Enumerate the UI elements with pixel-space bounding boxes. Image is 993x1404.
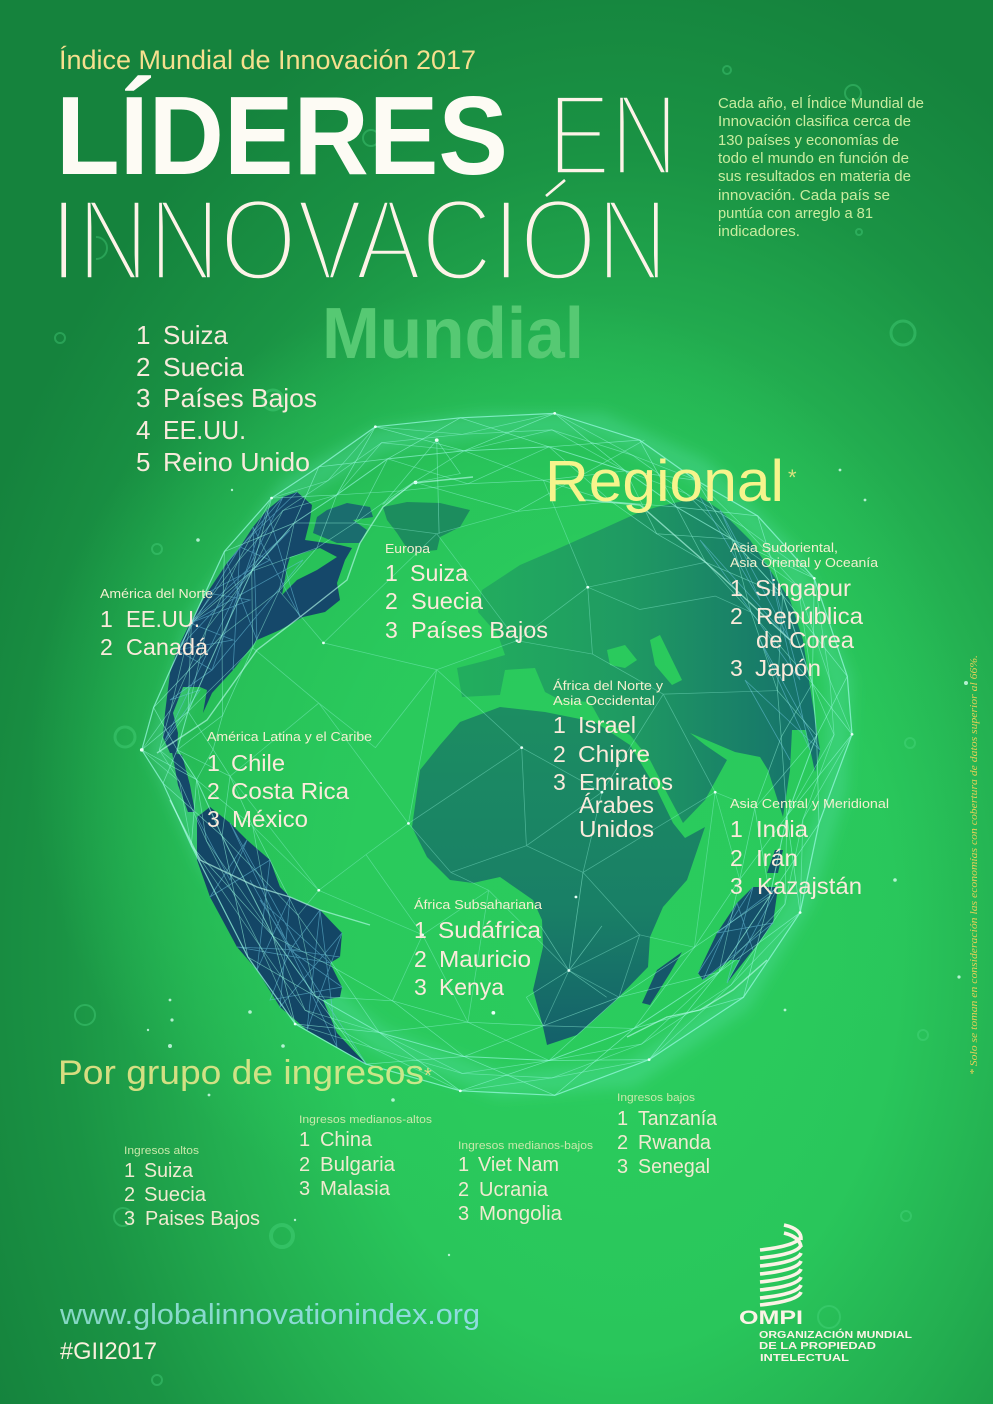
intro paragraph: innovación. Cada país se	[718, 188, 890, 204]
list: Ingresos altos: 3	[124, 1208, 135, 1230]
list: Asia Central y Meridional: Asia Central y Meridional	[730, 797, 889, 811]
list: Asia Central y Meridional: India	[756, 816, 808, 842]
mesh over dark continents	[165, 492, 820, 1065]
list: Ingresos medianos-altos: 3	[299, 1178, 310, 1200]
list: África del Norte y Asia Occidental: África del Norte y	[553, 678, 664, 693]
list: Ingresos bajos: 2	[617, 1132, 628, 1154]
list: Europa: Países Bajos	[411, 617, 548, 643]
heading: LÍDERES: LÍDERES	[56, 74, 508, 198]
network mesh	[140, 412, 853, 1095]
list: África del Norte y Asia Occidental: Emiratos	[579, 769, 673, 795]
list: Mundial ranking: 1	[136, 320, 150, 350]
list: Ingresos medianos-bajos: Viet Nam	[478, 1154, 559, 1176]
rim glow	[160, 425, 840, 1085]
list: Europa: Europa	[385, 542, 430, 556]
list: Europa	[385, 542, 548, 643]
list: Europa: 2	[385, 588, 398, 614]
list: Ingresos bajos: Rwanda	[638, 1132, 712, 1154]
list: Ingresos bajos: 3	[617, 1156, 628, 1178]
intro paragraph: puntúa con arreglo a 81	[718, 206, 873, 222]
continent: Australia	[698, 887, 778, 983]
list: Mundial ranking: Reino Unido	[163, 447, 310, 477]
list: África del Norte y Asia Occidental: Árabes	[579, 792, 654, 818]
list: América del Norte: EE.UU.	[126, 606, 200, 632]
list: Ingresos medianos-altos: 1	[299, 1129, 310, 1151]
list: América del Norte: 2	[100, 634, 113, 660]
list: Ingresos medianos-altos: China	[320, 1129, 373, 1151]
list: Asia Sudoriental, Asia Oriental y Oceanía: Singapur	[755, 575, 851, 601]
list: Mundial ranking: 4	[136, 415, 150, 445]
list: África Subsahariana: 2	[414, 946, 427, 972]
list: América Latina y el Caribe: 3	[207, 806, 220, 832]
subtitle: Índice Mundial de Innovación 2017	[59, 45, 476, 75]
list: Asia Central y Meridional: 2	[730, 845, 743, 871]
list: Asia Central y Meridional: Kazajstán	[757, 873, 862, 899]
list: Europa: 3	[385, 617, 398, 643]
list: Asia Sudoriental, Asia Oriental y Oceanía: 3	[730, 655, 743, 681]
list: Ingresos bajos: Tanzanía	[638, 1108, 718, 1130]
list: Ingresos altos: 1	[124, 1160, 135, 1182]
list: África Subsahariana: 1	[414, 917, 427, 943]
list: Asia Central y Meridional: 1	[730, 816, 743, 842]
list: América Latina y el Caribe: América Latina y el Caribe	[207, 730, 372, 744]
list: Mundial ranking: 3	[136, 383, 150, 413]
list: América Latina y el Caribe: 2	[207, 778, 220, 804]
intro paragraph: Cada año, el Índice Mundial de	[718, 95, 924, 112]
list: América Latina y el Caribe: Chile	[231, 750, 285, 776]
list: Mundial ranking: 2	[136, 352, 150, 382]
accent stroke	[546, 180, 565, 196]
heading: EN: EN	[548, 70, 678, 200]
hashtag: #GII2017	[60, 1338, 157, 1365]
logo subtitle: ORGANIZACIÓN MUNDIAL	[759, 1328, 913, 1341]
continent: Africa	[412, 707, 705, 1045]
list: Asia Central y Meridional: 3	[730, 873, 743, 899]
list: Ingresos medianos-altos	[299, 1114, 433, 1200]
list: Ingresos medianos-bajos: Mongolia	[479, 1203, 563, 1225]
list: Ingresos bajos: Ingresos bajos	[617, 1092, 696, 1104]
list: Ingresos medianos-altos: Ingresos medianos-altos	[299, 1114, 433, 1126]
list: Ingresos altos: Ingresos altos	[124, 1145, 200, 1157]
list: África del Norte y Asia Occidental: 1	[553, 712, 566, 738]
continent: Greenland	[383, 502, 470, 553]
list: Asia Central y Meridional: Irán	[756, 845, 798, 871]
list: Mundial ranking: 5	[136, 447, 150, 477]
list: Asia Sudoriental, Asia Oriental y Oceanía: 1	[730, 575, 743, 601]
list: Asia Central y Meridional	[730, 797, 889, 899]
heading: Por grupo de ingresos: *	[424, 1065, 432, 1087]
list: América Latina y el Caribe: México	[232, 806, 308, 832]
list: Ingresos medianos-bajos: 2	[458, 1179, 469, 1201]
mesh nodes	[140, 412, 853, 1092]
list: Mundial ranking	[136, 320, 317, 477]
list: Ingresos medianos-altos: 2	[299, 1154, 310, 1176]
side footnote: * Solo se toman en consideración las economías con cobertura de datos superior al 66%.	[969, 655, 980, 1075]
list: Ingresos medianos-altos: Bulgaria	[320, 1154, 396, 1176]
heading: INNOVACIÓN: INNOVACIÓN	[50, 175, 668, 305]
list: Ingresos medianos-bajos: 1	[458, 1154, 469, 1176]
list: Ingresos altos	[124, 1145, 260, 1230]
list: Ingresos altos: 2	[124, 1184, 135, 1206]
list: África del Norte y Asia Occidental: Asia Occidental	[553, 694, 655, 708]
continent: Indonesia	[767, 850, 783, 873]
list: África Subsahariana: Kenya	[439, 974, 504, 1000]
list: Ingresos bajos: 1	[617, 1108, 628, 1130]
list: Europa: Suecia	[411, 588, 483, 614]
continent: South America	[197, 807, 367, 1065]
list: África Subsahariana: Mauricio	[439, 946, 531, 972]
list: Mundial ranking: Suecia	[163, 352, 245, 382]
list: América Latina y el Caribe: Costa Rica	[231, 778, 349, 804]
list: América del Norte	[100, 587, 213, 660]
list: Asia Sudoriental, Asia Oriental y Oceanía: 2	[730, 603, 743, 629]
list: América del Norte: Canadá	[126, 634, 208, 660]
continent: Central America	[172, 752, 195, 812]
list: Ingresos bajos: Senegal	[638, 1156, 710, 1178]
list: África del Norte y Asia Occidental: 2	[553, 741, 566, 767]
list: Asia Sudoriental, Asia Oriental y Oceanía: Asia Sudoriental,	[730, 541, 838, 555]
list: América del Norte: 1	[100, 606, 113, 632]
bright inner arcs	[157, 477, 790, 1037]
list: Europa: Suiza	[410, 560, 468, 586]
list: Asia Sudoriental, Asia Oriental y Oceanía	[730, 541, 878, 681]
globe glow	[30, 285, 970, 1225]
list: África Subsahariana: África Subsahariana	[414, 897, 542, 912]
continent: Canadian Arctic	[313, 503, 373, 543]
list: Ingresos medianos-bajos: Ucrania	[479, 1179, 549, 1201]
heading: Regional: Regional	[545, 449, 784, 514]
list: Ingresos medianos-bajos: Ingresos medianos-bajos	[458, 1140, 594, 1152]
stars	[147, 469, 968, 1256]
list: Ingresos medianos-bajos	[458, 1140, 594, 1225]
title block	[50, 45, 678, 305]
list: América Latina y el Caribe	[207, 730, 372, 832]
icon: WIPO stripes	[760, 1225, 801, 1305]
intro paragraph: indicadores.	[718, 224, 800, 240]
heading: Mundial: Mundial	[322, 294, 584, 374]
list: África del Norte y Asia Occidental	[553, 678, 673, 842]
list: África del Norte y Asia Occidental: Unidos	[579, 816, 654, 842]
website URL: www.globalinnovationindex.org	[59, 1299, 480, 1331]
logo: OMPI	[739, 1225, 913, 1364]
list: América Latina y el Caribe: 1	[207, 750, 220, 776]
list: Ingresos altos: Suecia	[144, 1184, 207, 1206]
intro paragraph: todo el mundo en función de	[718, 151, 909, 167]
intro paragraph: 130 países y economías de	[718, 133, 899, 149]
list: África del Norte y Asia Occidental: Chipre	[578, 741, 650, 767]
list: África Subsahariana	[414, 897, 542, 1000]
globe with continents and network mesh	[140, 412, 853, 1095]
list: Mundial ranking: Países Bajos	[163, 383, 317, 413]
continent: North America	[163, 492, 352, 753]
list: Ingresos altos: Paises Bajos	[145, 1208, 260, 1230]
list: Mundial ranking: EE.UU.	[163, 415, 246, 445]
list: Asia Sudoriental, Asia Oriental y Oceanía: Japón	[755, 655, 821, 681]
intro paragraph: Innovación clasifica cerca de	[718, 114, 911, 130]
continent: Eurasia	[457, 497, 820, 823]
list: Europa: 1	[385, 560, 398, 586]
list: África del Norte y Asia Occidental: Israel	[578, 712, 636, 738]
list: Asia Sudoriental, Asia Oriental y Oceanía: República	[756, 603, 863, 629]
continent: Madagascar	[642, 952, 682, 1005]
list: Ingresos medianos-bajos: 3	[458, 1203, 469, 1225]
logo subtitle: DE LA PROPIEDAD	[759, 1340, 876, 1352]
intro paragraph	[718, 95, 924, 240]
list: África Subsahariana: Sudáfrica	[438, 917, 541, 943]
intro paragraph: sus resultados en materia de	[718, 169, 911, 185]
logo subtitle	[759, 1328, 913, 1364]
list: África Subsahariana: 3	[414, 974, 427, 1000]
list: Ingresos bajos	[617, 1092, 718, 1178]
heading: Por grupo de ingresos: Por grupo de ingresos	[58, 1054, 424, 1092]
heading: Regional: *	[788, 465, 797, 490]
list: Ingresos altos: Suiza	[144, 1160, 194, 1182]
list: Ingresos medianos-altos: Malasia	[320, 1178, 391, 1200]
logo name: OMPI	[739, 1308, 803, 1329]
list: Asia Sudoriental, Asia Oriental y Oceanía: Asia Oriental y Oceanía	[730, 556, 878, 570]
logo subtitle: INTELECTUAL	[760, 1352, 850, 1364]
list: América del Norte: América del Norte	[100, 587, 213, 601]
list: Asia Sudoriental, Asia Oriental y Oceanía: de Corea	[756, 627, 854, 653]
list: Mundial ranking: Suiza	[163, 320, 229, 350]
list: África del Norte y Asia Occidental: 3	[553, 769, 566, 795]
